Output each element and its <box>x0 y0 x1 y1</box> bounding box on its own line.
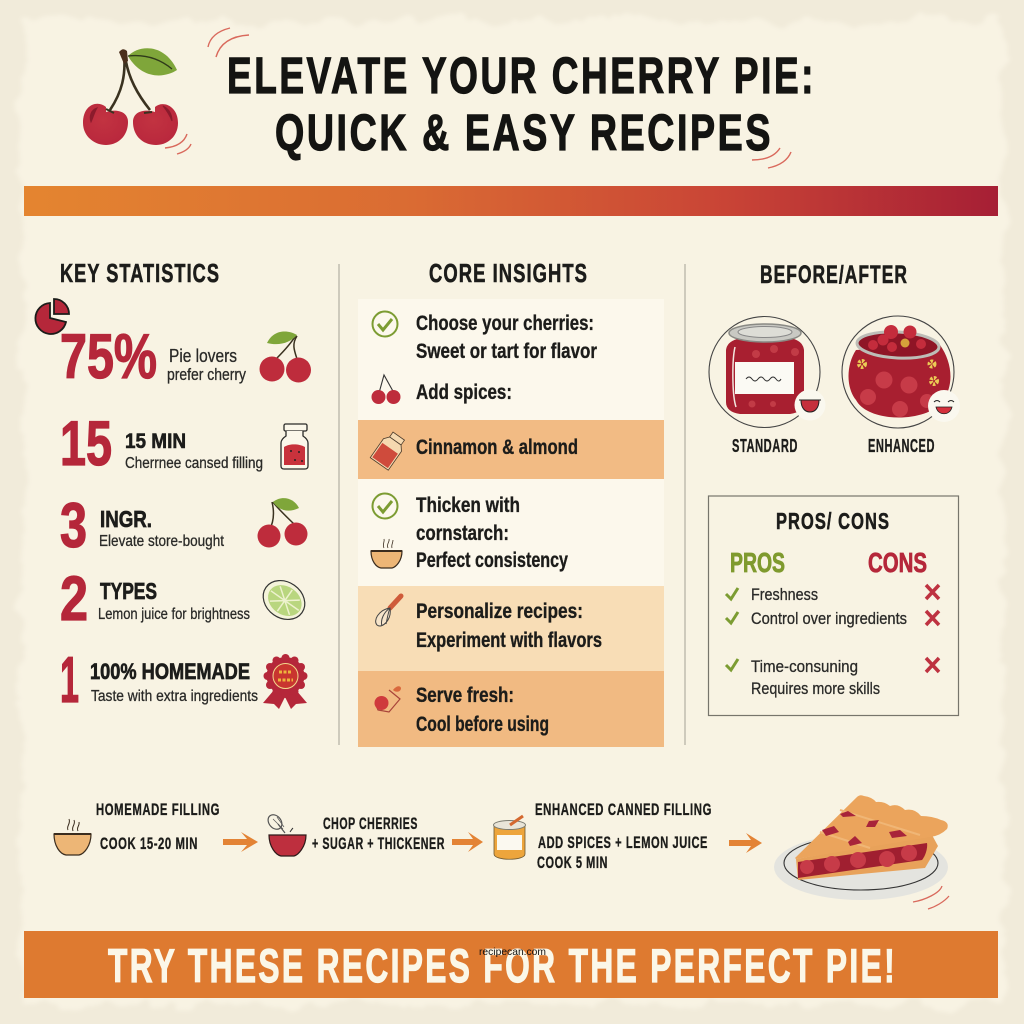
heading: pros: PROS <box>730 547 785 578</box>
gradient header bar <box>24 186 998 216</box>
icon: cherries <box>258 498 308 548</box>
label: standard: STANDARD <box>732 436 798 456</box>
stat: 2 types: Lemon juice for brightness <box>98 606 250 623</box>
icon: steaming bowl <box>54 819 91 855</box>
insight: personalize: Experiment with flavors <box>416 629 602 652</box>
heading: core insights: CORE INSIGHTS <box>429 258 588 288</box>
arrow <box>452 832 483 852</box>
stat: 2 types <box>60 564 250 634</box>
icon: neutral face badge <box>794 390 826 420</box>
heading: key statistics: KEY STATISTICS <box>60 258 220 288</box>
insight: cinnamon and almond: Cinnamon & almond <box>416 436 578 459</box>
stat: 75%: 75% <box>60 322 157 392</box>
stat: 75%: Pie lovers <box>169 346 237 366</box>
panel: core insights <box>358 258 664 747</box>
panel: before and after <box>709 261 960 456</box>
text: chop cherries: + SUGAR + THICKENER <box>312 834 445 853</box>
icons: red crosses <box>926 585 939 672</box>
stat: 15 min: 15 <box>60 409 112 479</box>
list: items: Requires more skills <box>751 679 880 698</box>
text: enhanced canned filling <box>535 800 712 872</box>
title: QUICK & EASY RECIPES <box>275 104 773 161</box>
icon: happy face badge <box>928 390 960 422</box>
insight: choose cherries: Choose your cherries: <box>416 312 594 335</box>
stat: 3 ingredients: Elevate store-bought <box>99 533 224 550</box>
list: items: Freshness <box>751 585 818 604</box>
icon: bowl <box>371 539 402 568</box>
stat: 75%: prefer cherry <box>167 365 246 384</box>
icon: jar of filling <box>281 424 308 469</box>
icon: award rosette <box>263 654 308 709</box>
arrow <box>223 832 258 852</box>
stat: 15 min <box>60 409 263 479</box>
text: enhanced canned filling: COOK 5 MIN <box>537 853 608 872</box>
icon: spice jar <box>370 430 408 470</box>
icon: serving cherry <box>374 686 401 712</box>
stat: 100% homemade: Taste with extra ingredients <box>91 688 258 705</box>
stat: 15 min: Cherrnee cansed filling <box>125 455 263 472</box>
insight rows background <box>358 299 664 747</box>
stat: 100% homemade <box>60 643 258 716</box>
insight: serve fresh: Serve fresh: <box>416 684 514 707</box>
icon: lime slice <box>256 573 312 627</box>
insight: serve fresh: Cool before using <box>416 713 549 736</box>
stat: 15 min: 15 MIN <box>125 430 186 453</box>
stat: 2 types: TYPES <box>100 578 157 604</box>
decorative swooshes: pie <box>913 886 949 909</box>
insight: serve fresh <box>416 684 549 736</box>
stat: 2 types: 2 <box>60 564 88 634</box>
icon: check circle <box>372 312 398 336</box>
icon: whisk <box>376 596 401 626</box>
icon: open can with spoon <box>494 816 526 859</box>
stat: 100% homemade: 100% HOMEMADE <box>90 659 250 684</box>
text: enhanced canned filling: ENHANCED CANNED FILLING <box>535 800 712 819</box>
decorative swooshes: header <box>165 28 791 168</box>
insight: thicken: Thicken with <box>416 494 520 517</box>
list: items: Time-consuning <box>751 657 858 676</box>
stat: 75% <box>60 322 246 392</box>
panel: pros and cons <box>708 496 958 716</box>
icon: cherries <box>260 331 311 382</box>
text: homemade filling: HOMEMADE FILLING <box>96 800 220 819</box>
stat: 3 ingredients <box>60 491 224 561</box>
heading: cons: CONS <box>868 547 927 578</box>
insight: thicken <box>416 494 568 572</box>
stat: 100% homemade: 1 <box>60 643 79 716</box>
panel: key statistics <box>35 258 312 716</box>
title <box>227 47 816 161</box>
illustration: standard jar <box>709 316 820 428</box>
icon: small cherries <box>372 375 400 404</box>
text: enhanced canned filling: ADD SPICES + LEMON JUICE <box>538 833 708 852</box>
arrow <box>729 833 762 853</box>
icons: green ticks <box>726 588 738 670</box>
stat: 3 ingredients: INGR. <box>100 506 152 532</box>
icon: header cherries <box>83 48 178 145</box>
insight: thicken: Perfect consistency <box>416 549 568 572</box>
insight: thicken: cornstarch: <box>416 522 509 545</box>
heading: before/after: BEFORE/AFTER <box>760 261 908 289</box>
list: items: Control over ingredients <box>751 609 907 628</box>
panel: recipe flow <box>54 795 949 909</box>
insight: personalize: Personalize recipes: <box>416 600 583 623</box>
heading: pros/cons: PROS/ CONS <box>776 508 890 534</box>
text: homemade filling <box>96 800 220 853</box>
text: homemade filling: COOK 15-20 MIN <box>100 834 198 853</box>
list: items <box>751 585 907 698</box>
watermark: recipecan.com <box>479 946 546 958</box>
icon: mixing bowl with whisk <box>265 812 306 856</box>
insight: personalize <box>416 600 602 652</box>
insight: add spices: Add spices: <box>416 381 512 404</box>
insight: choose cherries <box>416 312 597 363</box>
icon: pie chart <box>35 299 69 334</box>
icon: check circle <box>372 494 398 518</box>
stat: 3 ingredients: 3 <box>60 491 87 561</box>
text: chop cherries: CHOP CHERRIES <box>323 814 418 833</box>
label: enhanced: ENHANCED <box>868 436 935 456</box>
insight: choose cherries: Sweet or tart for flavor <box>416 340 597 363</box>
title: ELEVATE YOUR CHERRY PIE: <box>227 47 816 104</box>
text: chop cherries <box>312 814 445 853</box>
illustration: enhanced jar <box>842 316 954 428</box>
illustration: cherry pie slice <box>774 795 948 900</box>
